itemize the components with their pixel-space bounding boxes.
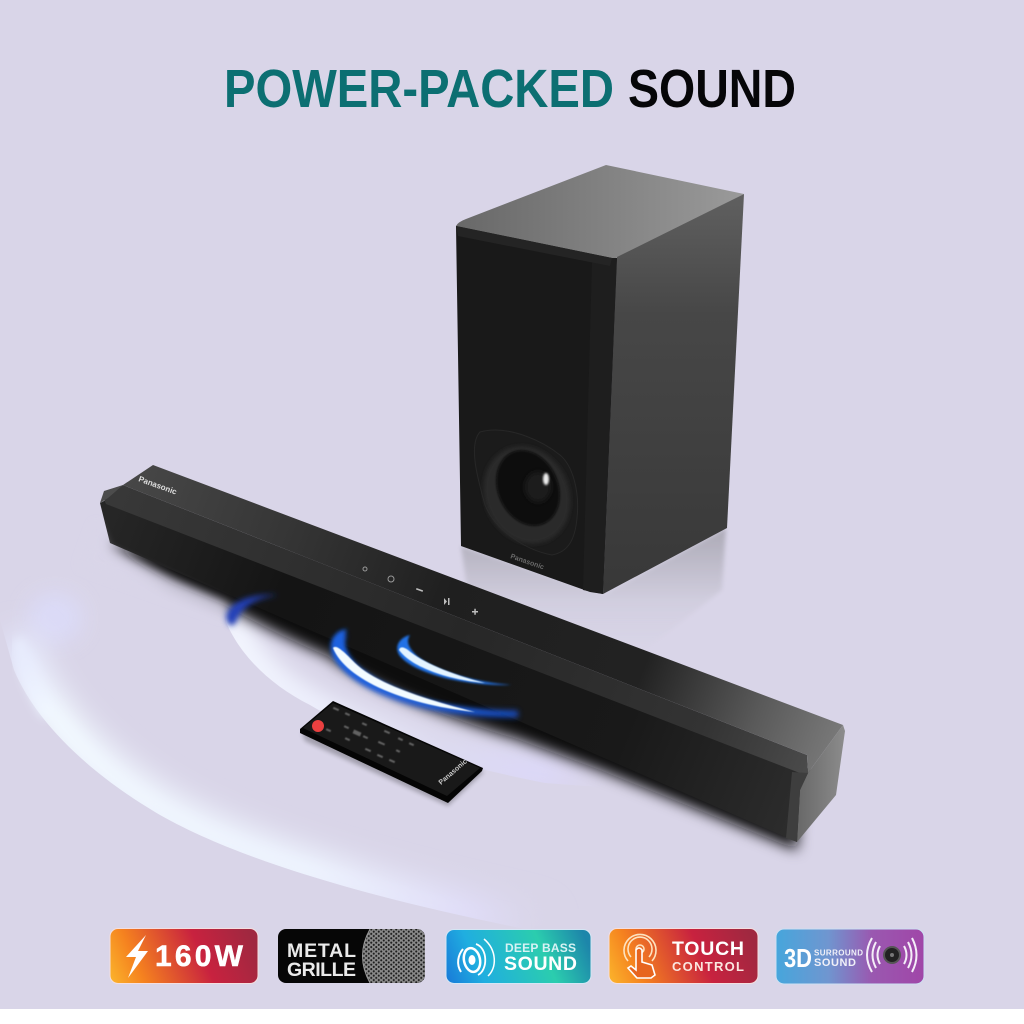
remote control [300, 701, 484, 806]
icon: lightning bolt [126, 935, 148, 978]
sound wave: inner arcs on soundbar [226, 595, 518, 714]
icon: speaker [458, 939, 494, 976]
wave: tip of mid arc [226, 595, 278, 625]
subwoofer [456, 165, 744, 594]
soundbar right end cap [797, 725, 845, 842]
badge: 3D surround sound: SOUND [814, 957, 856, 969]
soundbar [100, 465, 845, 842]
woofer driver [468, 430, 586, 558]
badge: metal grille: METAL [287, 940, 356, 962]
subwoofer logo: Panasonic [509, 553, 545, 571]
badge: 3D surround sound [776, 929, 924, 984]
soundbar mid glow on floor [228, 622, 600, 785]
wave: blue arc glow [339, 634, 518, 714]
remote buttons [326, 707, 414, 763]
soundbar logo: Panasonic [137, 474, 179, 497]
icon: surround speaker [867, 938, 916, 972]
wave: small arc [397, 635, 512, 685]
badge: 160W: 160W [155, 940, 244, 973]
badge: touch control [609, 928, 758, 984]
wave: blue arc [331, 629, 518, 714]
badge: touch control: TOUCH [672, 938, 744, 960]
badge: 3D surround sound: 3D [784, 943, 812, 973]
sound wave: large outer arc on floor [18, 592, 530, 926]
badge: 160W [110, 928, 258, 984]
icon: finger touch [624, 934, 656, 978]
subwoofer side face [603, 194, 744, 594]
soundbar shadow on floor [108, 545, 800, 850]
badge: metal grille [278, 929, 426, 983]
subwoofer floor reflection [461, 528, 726, 670]
badge: deep bass sound [446, 930, 591, 984]
title: POWER-PACKED [224, 59, 614, 119]
badge: deep bass sound: SOUND [504, 953, 577, 975]
badge: 3D surround sound: SURROUND [814, 948, 863, 958]
soundbar front face [100, 490, 812, 842]
subwoofer top face [456, 165, 744, 258]
badge: metal grille: GRILLE [287, 959, 356, 981]
soundbar left end cap [100, 485, 123, 503]
badge: deep bass sound: DEEP BASS [505, 941, 576, 955]
badge: touch control: CONTROL [672, 959, 744, 974]
subwoofer front face [456, 226, 617, 594]
title: SOUND [628, 59, 796, 119]
touch controls [363, 567, 478, 615]
metal mesh texture [360, 929, 426, 983]
soundbar top face [123, 465, 843, 773]
soundbar chamfer [103, 485, 808, 775]
remote logo: Panasonic [438, 758, 469, 787]
soft fade over lower left soundbar edge [80, 522, 226, 618]
red power button [312, 720, 324, 732]
